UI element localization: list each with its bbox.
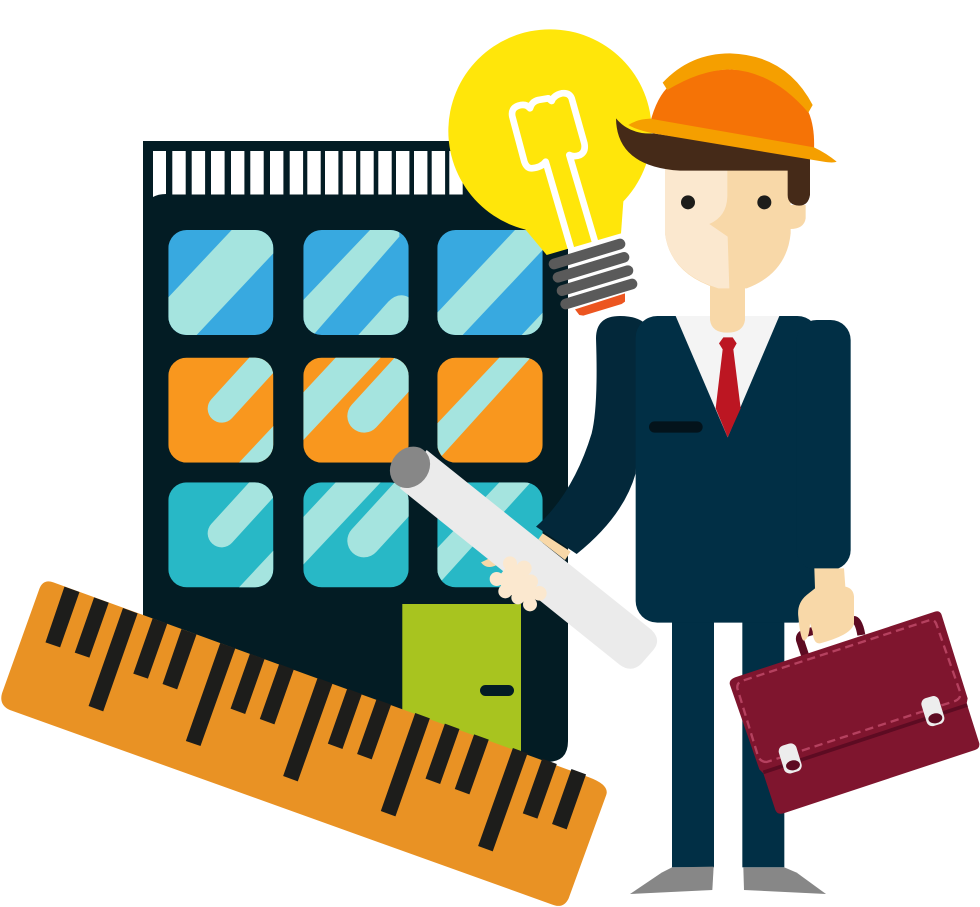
face highlight bbox=[665, 167, 729, 288]
bulb tip bbox=[575, 293, 625, 316]
bulb screw base bbox=[554, 244, 632, 304]
suit and arms bbox=[536, 283, 851, 623]
man bbox=[536, 53, 851, 894]
bulb filament bbox=[512, 93, 595, 247]
door bbox=[402, 604, 521, 754]
scroll end bbox=[382, 438, 438, 496]
building bbox=[143, 141, 568, 762]
pocket bbox=[649, 421, 703, 433]
thumb bbox=[481, 555, 497, 567]
left clasp bbox=[777, 742, 803, 775]
ruler body bbox=[1, 581, 607, 906]
window: teal 3 bbox=[437, 482, 543, 587]
face bbox=[665, 167, 791, 288]
torso bbox=[636, 316, 819, 623]
window: teal 1 bbox=[168, 477, 273, 587]
window: blue 2 bbox=[303, 230, 409, 335]
bulb glass bbox=[448, 29, 652, 255]
neck bbox=[710, 283, 745, 333]
window: blue 3 bbox=[437, 230, 543, 335]
shirt bbox=[676, 316, 779, 437]
window: blue 1 bbox=[168, 230, 273, 335]
wrist bbox=[538, 533, 571, 560]
legs bbox=[630, 620, 826, 894]
ear bbox=[788, 205, 806, 229]
briefcase flap line bbox=[763, 705, 967, 772]
window: teal 2 bbox=[303, 482, 417, 587]
briefcase stitching bbox=[737, 620, 960, 762]
rolled blueprint with hand bbox=[382, 438, 657, 669]
window: orange 3 bbox=[437, 358, 543, 463]
roof stripes bbox=[153, 151, 463, 197]
hard hat brim bbox=[628, 119, 837, 162]
briefcase and holding hand bbox=[730, 568, 979, 814]
windows bbox=[168, 230, 543, 587]
scroll tube bbox=[400, 450, 657, 669]
ruler bbox=[1, 581, 607, 906]
hair bbox=[616, 118, 810, 206]
eyes bbox=[681, 195, 771, 209]
light bulb bbox=[448, 29, 652, 316]
ruler ticks bbox=[45, 587, 586, 851]
raised arm bbox=[536, 316, 645, 554]
hard hat ridge bbox=[663, 53, 813, 113]
window: orange 1 bbox=[168, 352, 273, 463]
shoes bbox=[630, 867, 826, 894]
lowered arm bbox=[797, 320, 851, 570]
holding hand bbox=[798, 568, 854, 643]
briefcase body bbox=[730, 611, 979, 814]
head bbox=[616, 53, 837, 288]
gripping hand bbox=[490, 556, 547, 611]
right clasp bbox=[920, 695, 946, 728]
building body bbox=[143, 141, 568, 762]
briefcase handle bbox=[800, 620, 861, 655]
hard hat dome bbox=[650, 69, 814, 150]
tie bbox=[716, 337, 741, 437]
window: orange 2 bbox=[303, 358, 417, 463]
door handle bbox=[480, 685, 514, 696]
